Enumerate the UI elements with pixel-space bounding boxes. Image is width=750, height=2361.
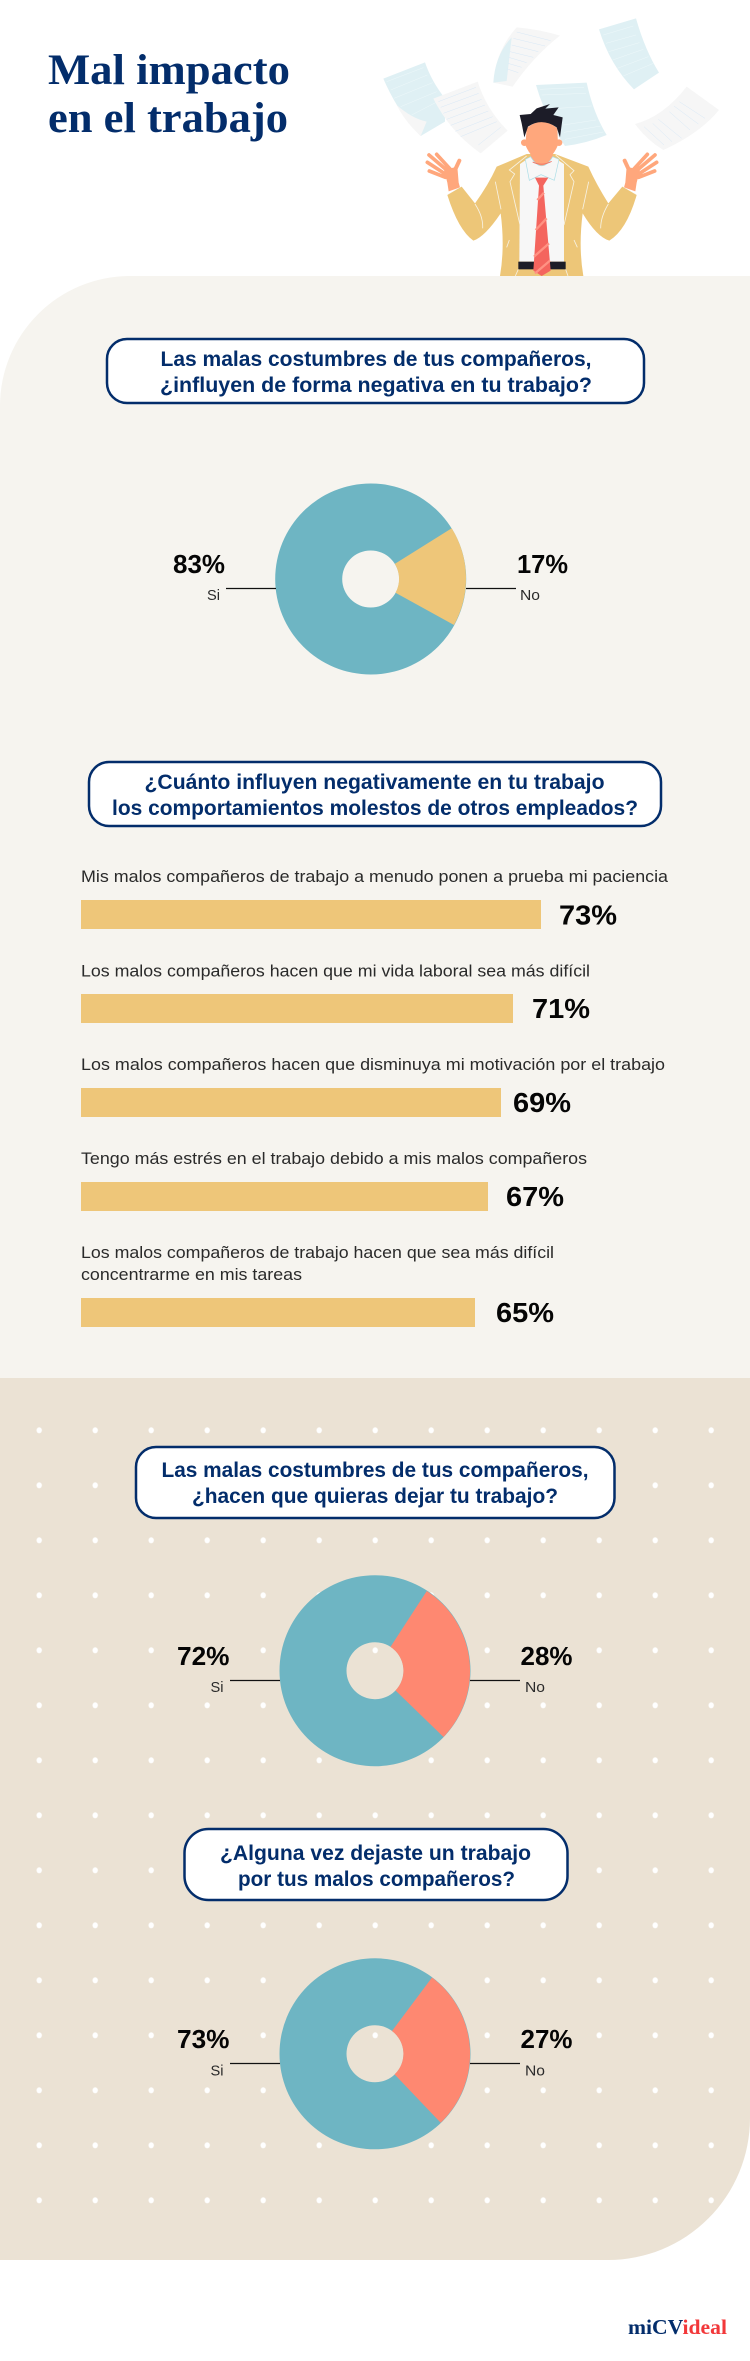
donut chart: 83% si, 17% no [173,484,568,674]
bar 73%: 73% [559,900,617,930]
bar 65%: Los malos compañeros de trabajo hacen que sea más difícil [81,1244,554,1262]
heading box: question 3: ¿hacen que quieras dejar tu trabajo? [192,1485,558,1508]
logo: miCVideal [628,2315,727,2339]
icon: collar [525,157,559,180]
donut chart: 83% si, 17% no: No [520,587,540,604]
donut chart: 73% si, 27% no [177,1958,572,2149]
donut chart: 73% si, 27% no: Si [210,2062,224,2080]
bar 73% [81,868,669,930]
heading box: question 4: por tus malos compañeros? [238,1868,515,1891]
donut chart: 73% si, 27% no: 27% [520,2024,572,2054]
title [48,47,290,142]
heading box: question 3 [136,1447,614,1518]
donut chart: 72% si, 28% no: 28% [520,1641,572,1671]
panel: light section [0,276,750,1378]
donut chart: 83% si, 17% no: Si [207,587,220,604]
heading box: question 2: ¿Cuánto influyen negativamente en tu trabajo [144,771,604,794]
icon: flying papers [383,18,719,153]
bar chart: negative influence [81,868,669,1328]
heading box: question 3: Las malas costumbres de tus compañeros, [162,1459,588,1482]
icon: tie [533,178,551,276]
donut chart: 72% si, 28% no: Si [210,1679,224,1696]
donut chart: 73% si, 27% no: No [525,2062,545,2080]
bar 67%: Tengo más estrés en el trabajo debido a mis malos compañeros [81,1150,587,1168]
donut chart: 83% si, 17% no: 17% [517,549,568,579]
icon: left hand [427,154,463,196]
bar 71%: 71% [532,993,590,1024]
donut chart: 72% si, 28% no: No [525,1679,545,1696]
bar 67%: 67% [506,1181,564,1212]
donut chart: 72% si, 28% no: 72% [177,1641,230,1671]
donut chart: 83% si, 17% no: 83% [173,549,225,579]
icon: jacket [447,154,637,276]
donut chart: 72% si, 28% no [177,1575,572,1766]
panel: beige section [0,1378,750,2260]
bar 71% [81,962,590,1024]
heading box: question 4: ¿Alguna vez dejaste un trabajo [220,1842,531,1865]
bar 71%: Los malos compañeros hacen que mi vida laboral sea más difícil [81,962,590,980]
icon: hair [520,104,563,137]
bar 65%: concentrarme en mis tareas [81,1266,302,1284]
bar 65%: 65% [496,1297,554,1328]
icon: right hand [621,154,657,196]
title: Mal impacto [48,47,290,94]
bar 69% [81,1056,665,1118]
icon: belt [518,262,566,269]
heading box: question 2 [89,762,661,826]
bar 67% [81,1150,587,1212]
heading box: question 1 [107,339,644,403]
heading box: question 2: los comportamientos molestos de otros empleados? [112,797,638,820]
heading box: question 4 [184,1829,568,1900]
bar 73%: Mis malos compañeros de trabajo a menudo ponen a prueba mi paciencia [81,868,669,886]
bar 69%: 69% [513,1087,571,1118]
bar 69%: Los malos compañeros hacen que disminuya mi motivación por el trabajo [81,1056,665,1074]
heading box: question 1: Las malas costumbres de tus compañeros, [160,348,592,371]
icon: neck [531,153,553,166]
heading box: question 1: ¿influyen de forma negativa en tu trabajo? [160,374,592,397]
title: en el trabajo [48,95,288,142]
icon: head [521,122,562,164]
donut chart: 73% si, 27% no: 73% [177,2024,230,2054]
illustration: man throwing papers [383,18,719,276]
bar 65% [81,1244,554,1328]
